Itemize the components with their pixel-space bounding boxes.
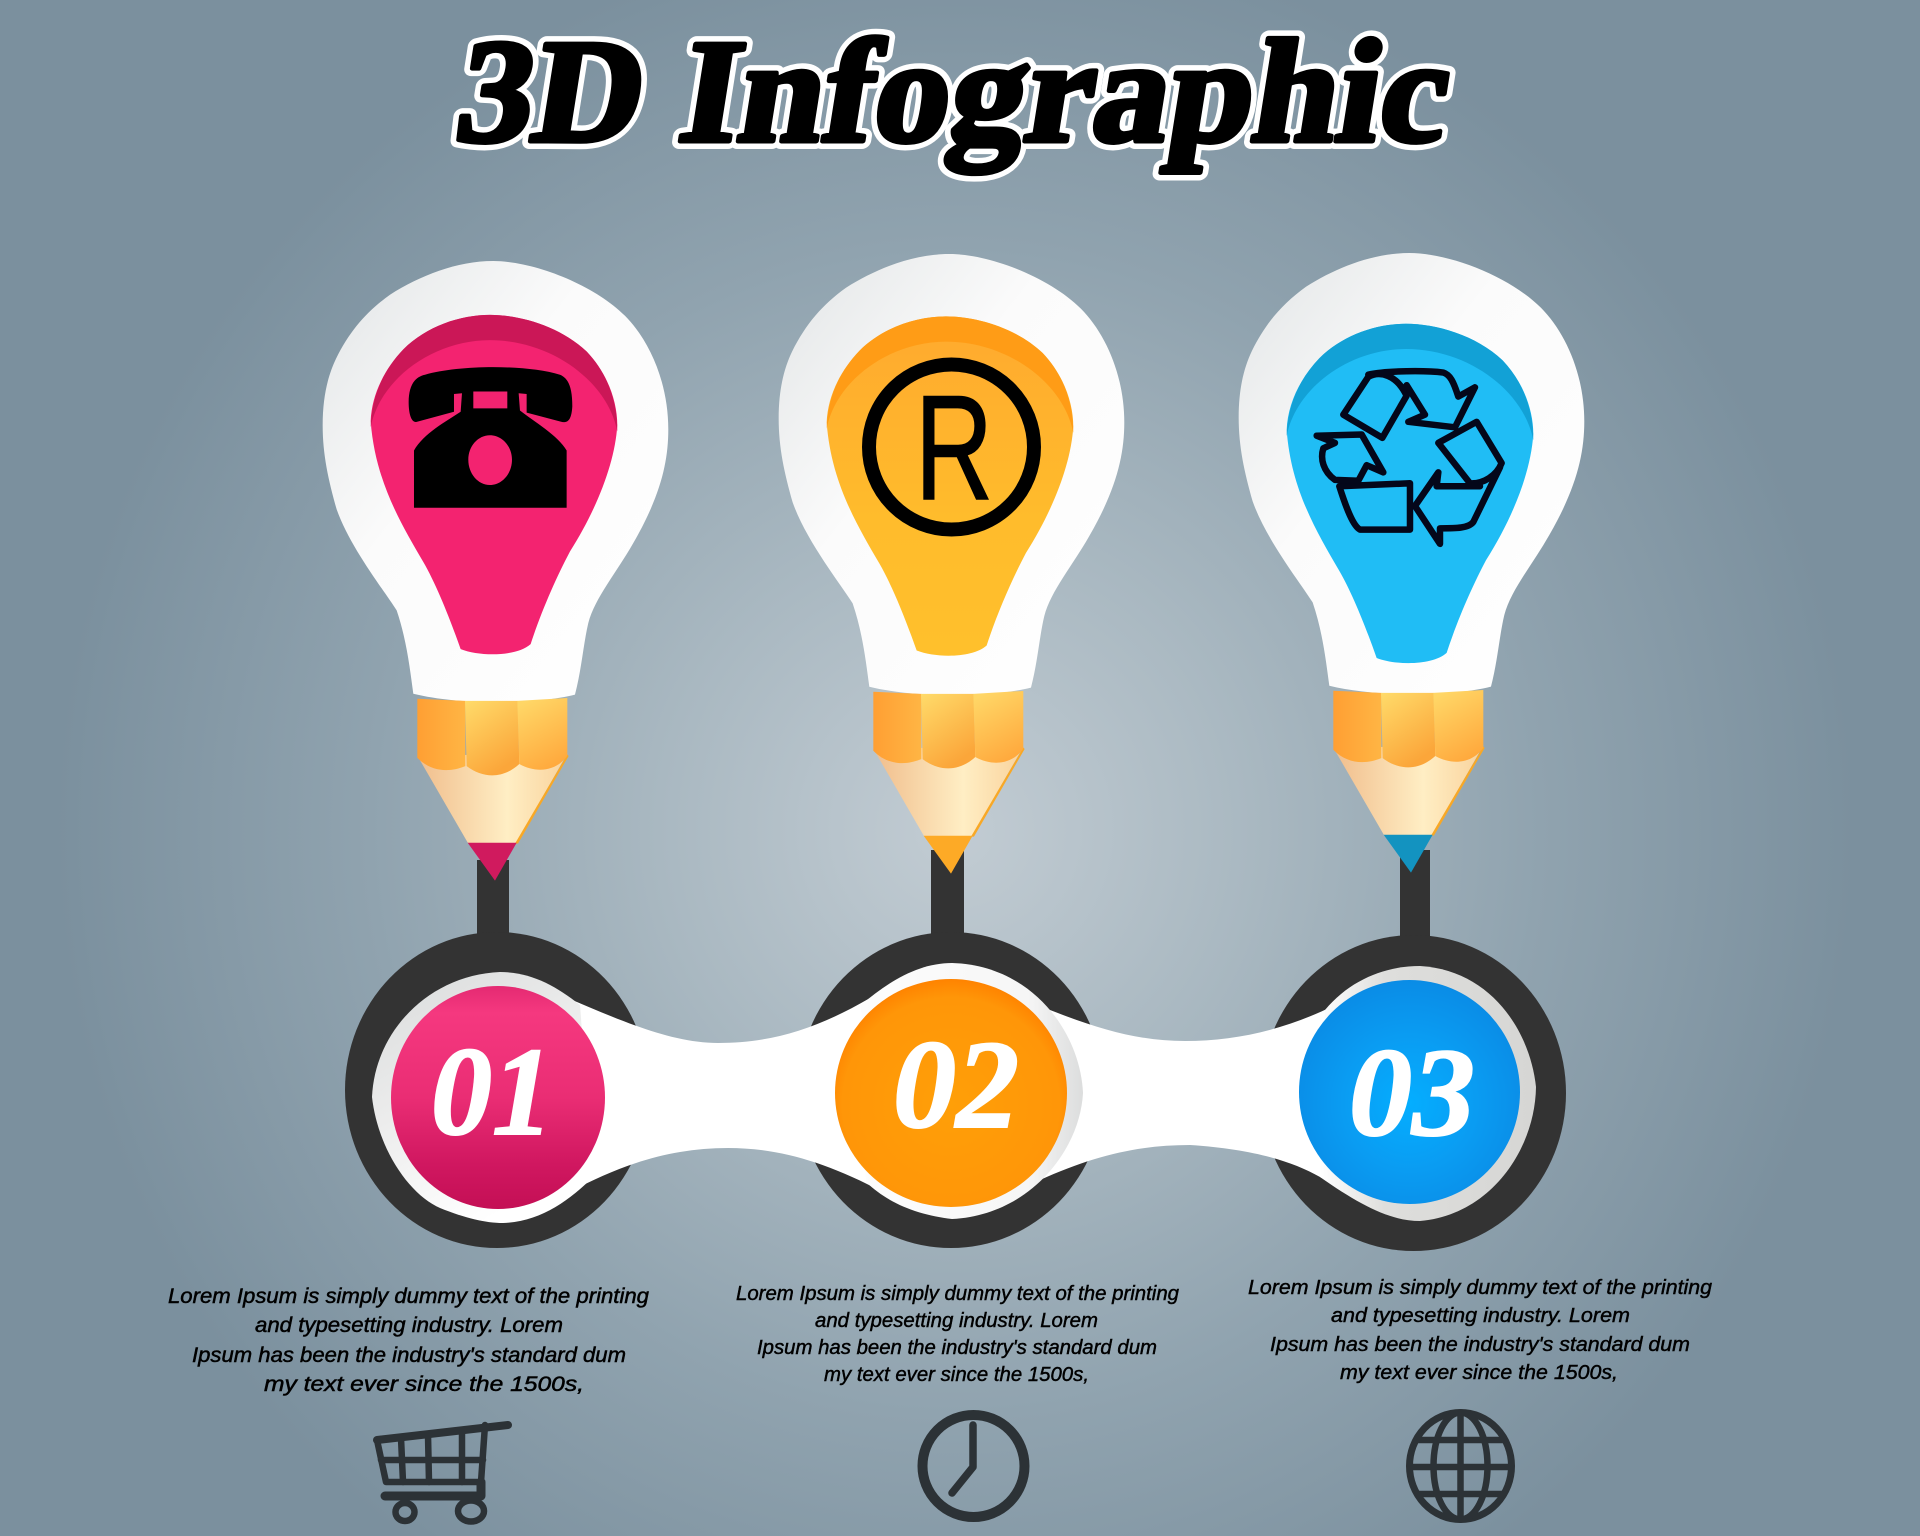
text block 3: my text ever since the 1500s, bbox=[1340, 1361, 1618, 1384]
step 03 badge: 03 bbox=[1349, 1024, 1475, 1163]
text block 2: Lorem Ipsum is simply dummy text of the printing bbox=[736, 1283, 1179, 1305]
icon: registered mark bbox=[869, 364, 1034, 531]
text block 2: and typesetting industry. Lorem bbox=[815, 1310, 1098, 1332]
connector stems bbox=[477, 850, 1430, 945]
text block 3: Lorem Ipsum is simply dummy text of the printing bbox=[1248, 1276, 1713, 1299]
text block 1: and typesetting industry. Lorem bbox=[255, 1314, 563, 1337]
text block 1: Ipsum has been the industry's standard dum bbox=[192, 1344, 626, 1367]
icon: registered mark: R bbox=[915, 364, 993, 531]
window shadow 3 bbox=[1287, 324, 1533, 440]
bulb colour window 2 bbox=[827, 316, 1073, 656]
step 02 badge: 02 bbox=[893, 1016, 1019, 1155]
title: 3D Infographic bbox=[447, 10, 1463, 174]
pencil 2 bbox=[873, 691, 1025, 837]
window shadow 2 bbox=[827, 316, 1073, 433]
text block 1 bbox=[168, 1285, 649, 1396]
bulb shell 2 bbox=[779, 254, 1124, 695]
text block 1: my text ever since the 1500s, bbox=[264, 1373, 584, 1396]
icon: globe bbox=[1409, 1412, 1512, 1520]
step 01 badge bbox=[372, 972, 605, 1223]
white connector band bbox=[565, 997, 1335, 1192]
bulb shell 1 bbox=[323, 261, 668, 702]
window shadow 1 bbox=[371, 315, 617, 432]
icon: telephone bbox=[409, 367, 572, 508]
icon: shopping cart bbox=[377, 1425, 508, 1522]
text block 3 bbox=[1248, 1276, 1713, 1384]
text block 2: Ipsum has been the industry's standard dum bbox=[757, 1337, 1157, 1359]
text block 2: my text ever since the 1500s, bbox=[824, 1364, 1089, 1386]
bulb colour window 3 bbox=[1287, 324, 1533, 663]
bulb pencil 2: registered bbox=[779, 254, 1124, 874]
pencil 3 bbox=[1333, 690, 1485, 836]
bulb shell 3 bbox=[1239, 253, 1584, 694]
icon: clock bbox=[922, 1415, 1024, 1517]
title: 3D Infographic bbox=[447, 10, 1463, 174]
text block 3: Ipsum has been the industry's standard dum bbox=[1270, 1333, 1690, 1356]
dark rings bbox=[345, 932, 1566, 1251]
step 01 badge: 01 bbox=[431, 1023, 553, 1162]
text block 1: Lorem Ipsum is simply dummy text of the printing bbox=[168, 1285, 649, 1308]
text block 2 bbox=[736, 1283, 1179, 1386]
bulb colour window 1 bbox=[371, 315, 617, 654]
pencil tip 1 bbox=[468, 843, 517, 881]
step 03 badge bbox=[1299, 966, 1536, 1221]
pencil 1 bbox=[417, 698, 569, 844]
icon: recycle bbox=[1317, 371, 1502, 544]
step 02 badge bbox=[835, 963, 1083, 1219]
bulb pencil 3: recycle bbox=[1239, 253, 1584, 873]
bulb pencil 1: phone bbox=[323, 261, 668, 881]
text block 3: and typesetting industry. Lorem bbox=[1331, 1304, 1630, 1327]
pencil tip 2 bbox=[924, 836, 973, 874]
pencil tip 3 bbox=[1384, 835, 1433, 873]
